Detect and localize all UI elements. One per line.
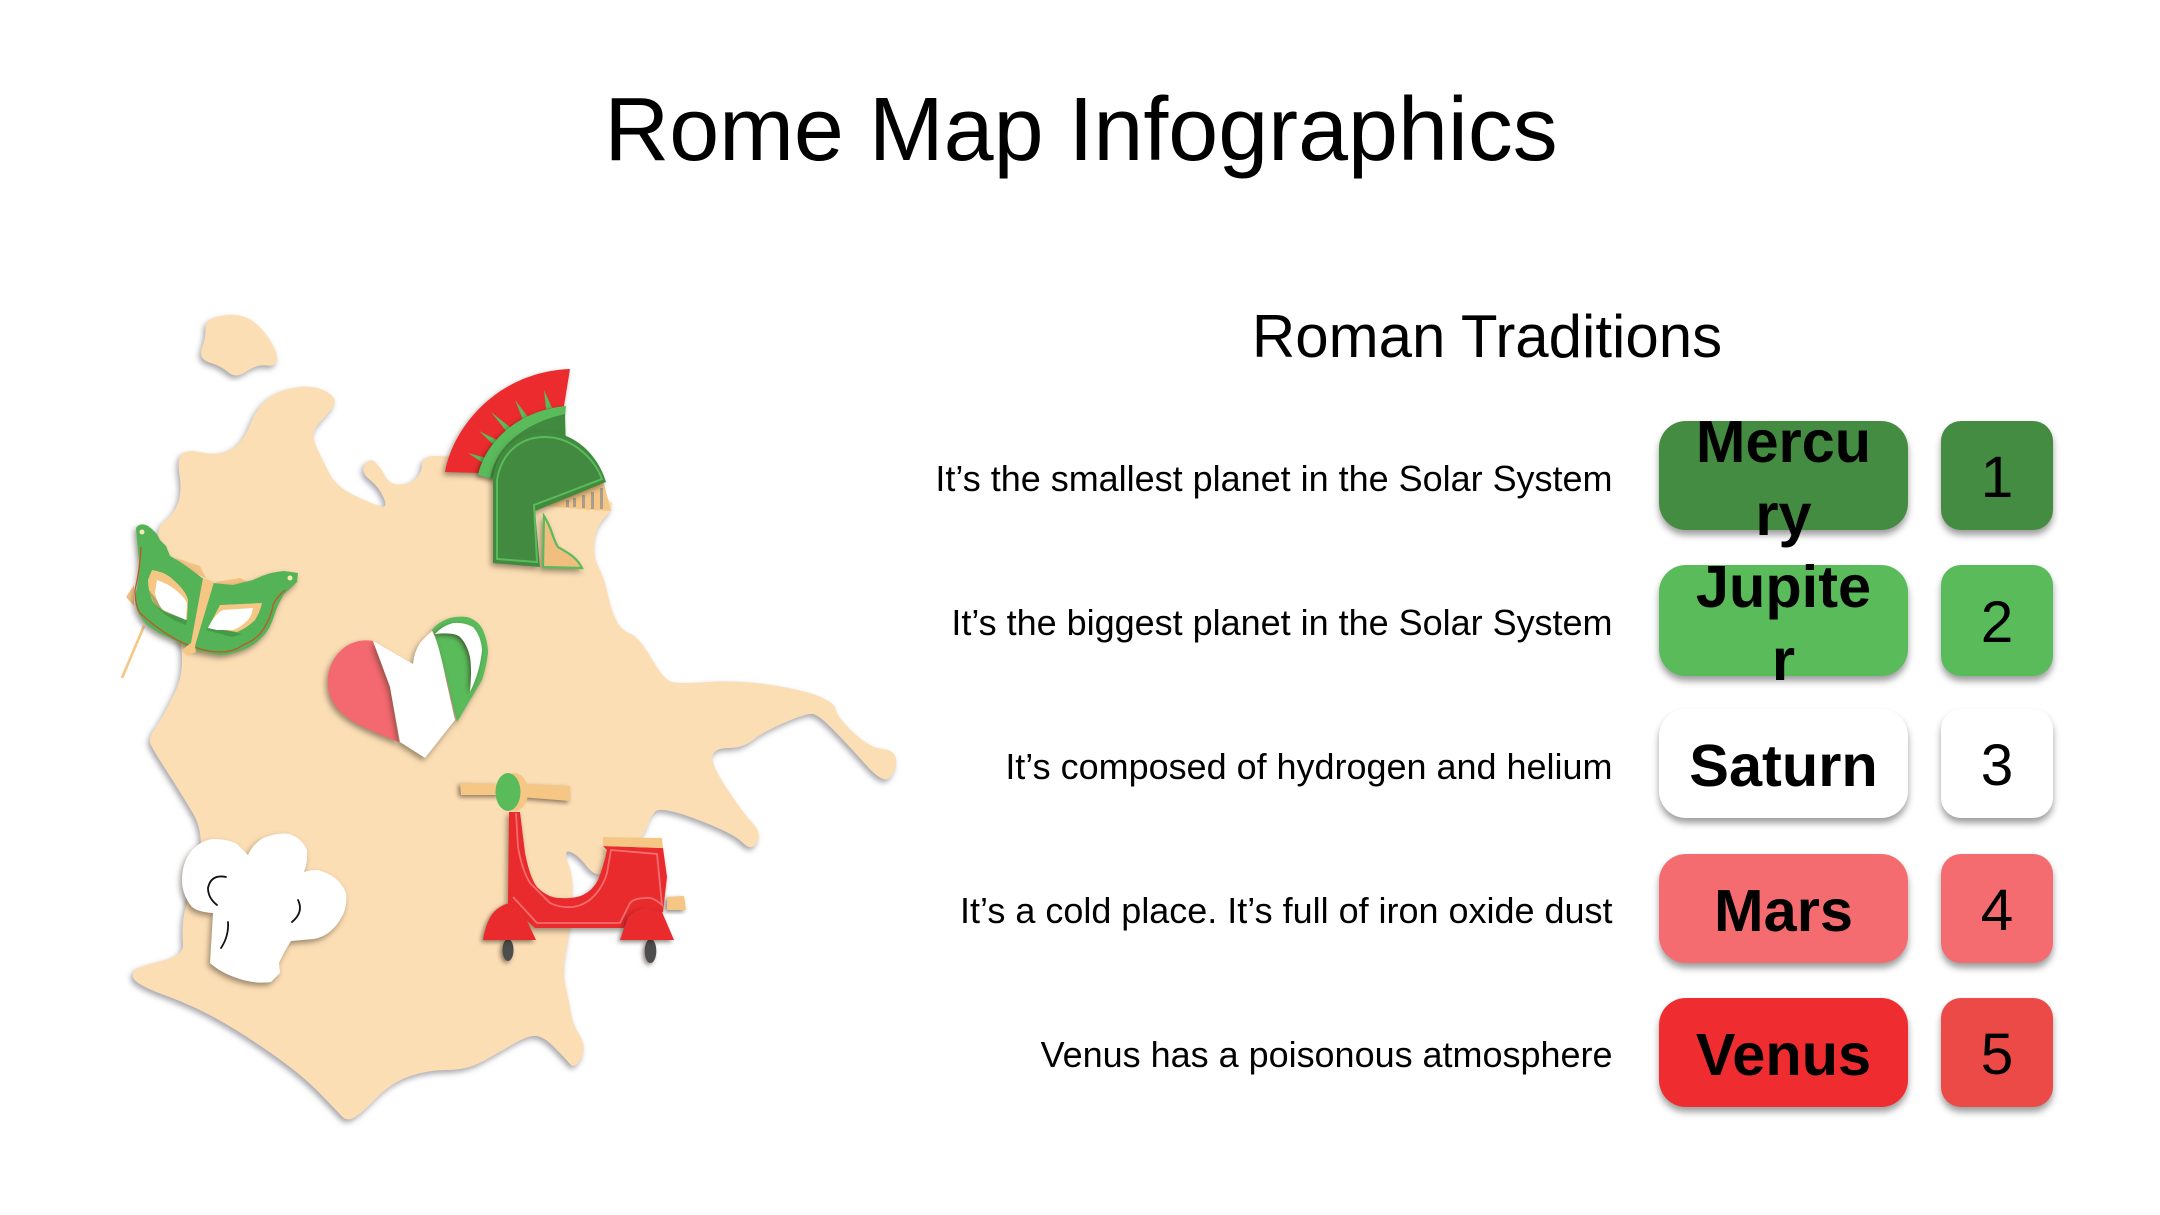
row 5 name: Venus [1696, 1021, 1871, 1088]
icon: scooter [460, 773, 686, 963]
hat creases [208, 876, 300, 948]
row 3 number [1941, 709, 2053, 818]
scooter rear fender [620, 908, 674, 940]
mask line [135, 547, 285, 652]
helmet shell [493, 432, 606, 567]
heart green [432, 617, 488, 722]
scooter body [508, 812, 667, 928]
heading: Roman Traditions: Roman Traditions [1252, 303, 1722, 370]
row 3 text: It’s composed of hydrogen and helium [1005, 746, 1612, 787]
scooter handlebars [460, 783, 570, 801]
heart white [373, 631, 455, 758]
row 5 name [1659, 998, 1908, 1107]
row 3 name [1659, 709, 1908, 818]
row 2 name: Jupiter [1696, 552, 1871, 692]
mask backing [126, 558, 252, 606]
icon: helmet [445, 369, 611, 568]
mask face [135, 524, 298, 655]
crest spikes [468, 390, 552, 463]
row 2 text: It’s the biggest planet in the Solar System [951, 602, 1612, 643]
mask dots [140, 530, 292, 580]
map: island [201, 315, 277, 376]
row 4 name: Mars [1714, 877, 1853, 944]
right eye [208, 603, 262, 632]
row 3 number: 3 [1981, 733, 2013, 798]
heart red [328, 640, 399, 742]
icon: carnival mask [122, 524, 298, 678]
row 1 name [1659, 421, 1908, 530]
helmet band [478, 406, 566, 480]
row 1 name: Mercury [1696, 408, 1871, 548]
row 1 text: It’s the smallest planet in the Solar System [935, 458, 1612, 499]
row 1 number: 1 [1981, 445, 2013, 510]
scooter headlight back [502, 773, 528, 811]
row 4 number: 4 [1981, 878, 2013, 943]
scooter trim [513, 813, 662, 923]
mask stick [122, 626, 144, 678]
row 3 name: Saturn [1689, 732, 1878, 799]
left eye [148, 570, 188, 620]
helmet trim [497, 437, 602, 562]
row 2 name [1659, 565, 1908, 676]
row 2 number [1941, 565, 2053, 676]
row 1 number [1941, 421, 2053, 530]
heart crescent [435, 623, 482, 692]
title: Rome Map Infographics [604, 80, 1558, 180]
row 2 number: 2 [1981, 590, 2013, 655]
scooter wheels [502, 939, 656, 963]
row 4 text: It’s a cold place. It’s full of iron oxide dust [960, 890, 1612, 931]
row 4 name [1659, 854, 1908, 963]
cheek guard [543, 516, 582, 568]
row 5 text: Venus has a poisonous atmosphere [1041, 1034, 1612, 1075]
scooter seat [603, 837, 663, 848]
helmet crest [445, 369, 570, 473]
icon: Italian flag heart [328, 617, 488, 758]
row 4 number [1941, 854, 2053, 963]
row 5 number [1941, 998, 2053, 1107]
visor grill [540, 480, 611, 511]
row 5 number: 5 [1981, 1022, 2013, 1087]
hat shape [182, 834, 346, 983]
scooter headlight [496, 773, 520, 811]
scooter front fender [483, 903, 536, 940]
mask centre stick [182, 578, 214, 656]
icon: chef hat [182, 834, 346, 983]
scooter rear bar [667, 896, 686, 910]
map: Rome mainland [133, 387, 896, 1119]
